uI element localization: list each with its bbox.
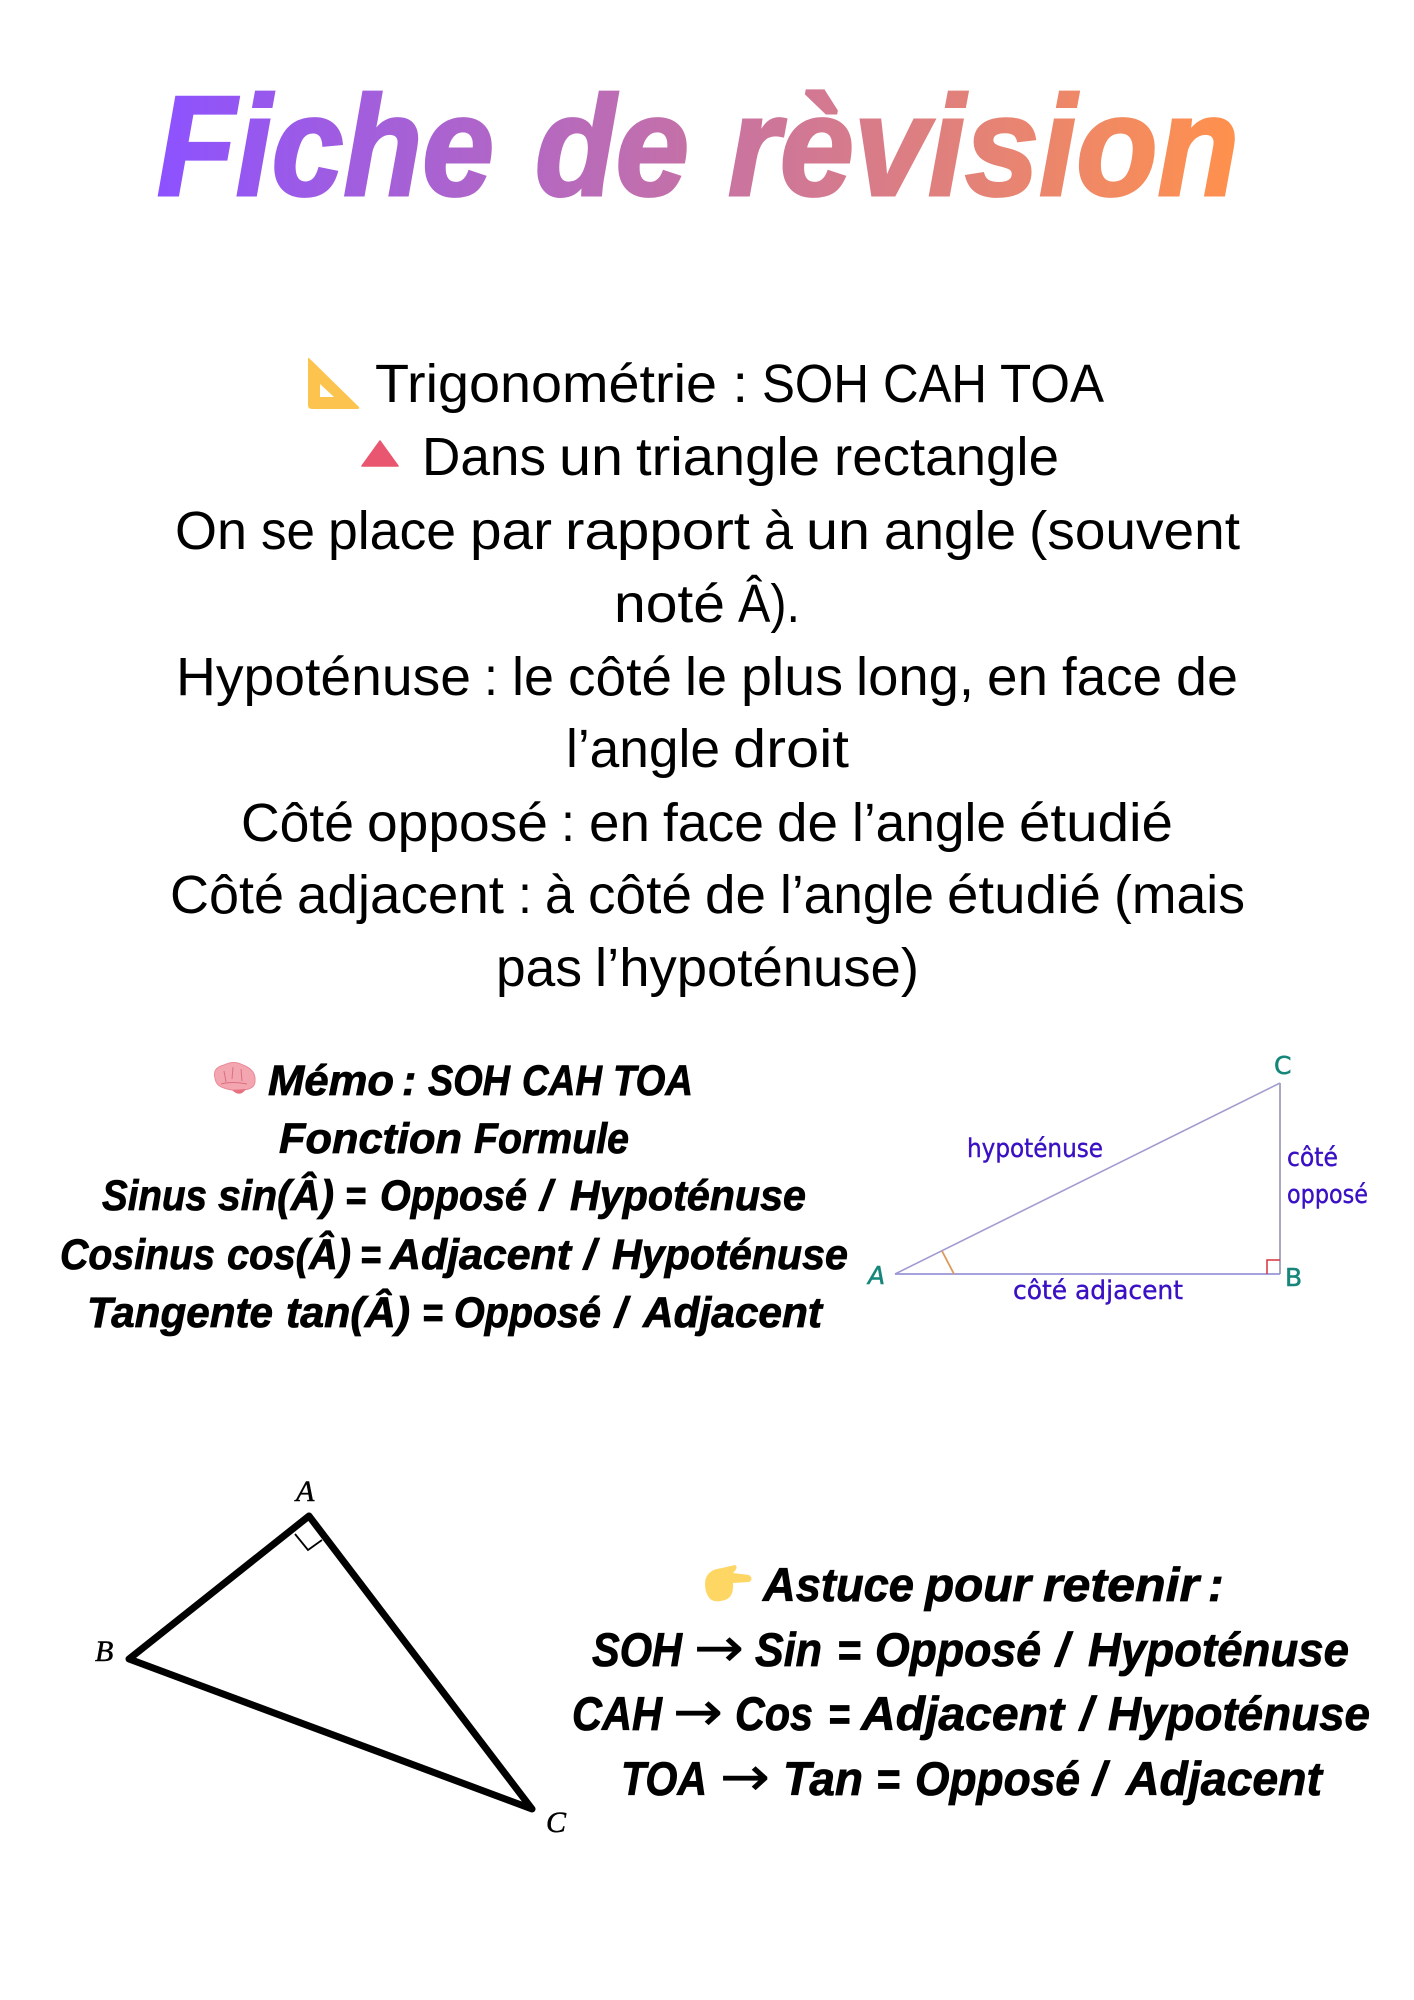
subheading: right triangle — [422, 427, 1059, 487]
mnemonic: SOH: = — [837, 1623, 861, 1676]
text block: mnemonic tip — [572, 1558, 1370, 1808]
mnemonic: CAH — [572, 1680, 1370, 1743]
mnemonic: CAH: = — [828, 1687, 850, 1740]
definition: hypotenuse: de — [1176, 647, 1238, 707]
mnemonic: SOH: SOH — [592, 1623, 683, 1676]
formula: cosine: cos(Â) — [227, 1230, 351, 1279]
definition: angle: (souvent — [1029, 501, 1240, 561]
title — [157, 67, 1239, 226]
definition: hypotenuse: plus — [741, 647, 843, 707]
mnemonic: SOH: Sin — [755, 1623, 822, 1676]
table header: Formule — [474, 1115, 629, 1163]
heading: trigonometry: Trigonométrie : — [375, 354, 748, 414]
formula: cosine: Cosinus — [60, 1231, 215, 1279]
definition: angle: On — [175, 501, 247, 561]
right angle square — [295, 1534, 322, 1550]
definition: opposite side: en — [589, 793, 650, 853]
definition: angle: à — [764, 501, 794, 561]
formula: sine: = — [345, 1172, 366, 1220]
mnemonic: TOA: = — [876, 1752, 900, 1805]
formula: tangent: = — [422, 1289, 443, 1337]
mnemonic: CAH: Cos — [735, 1687, 813, 1740]
side label: opposite — [1287, 1143, 1368, 1210]
formula: tangent: / — [613, 1289, 631, 1337]
formula: tangent: Adjacent — [642, 1289, 824, 1337]
memo heading: TOA — [613, 1057, 693, 1105]
definition: hypotenuse: : — [484, 647, 498, 707]
vertex labels: B — [95, 1635, 113, 1668]
icon: brain — [214, 1062, 255, 1094]
mnemonic: SOH: Opposé — [875, 1623, 1041, 1676]
side label: adjacent: côté adjacent — [1013, 1276, 1183, 1306]
definition: adjacent side: pas — [496, 938, 582, 998]
definition: opposite side — [241, 793, 1173, 853]
mnemonic: SOH: Hypoténuse — [1088, 1623, 1349, 1676]
formula: tangent: Tangente — [87, 1289, 273, 1337]
formula: sine — [102, 1171, 806, 1220]
definition: adjacent side: à — [545, 865, 575, 925]
formula: tangent — [87, 1288, 824, 1337]
definition: hypotenuse: en — [987, 647, 1048, 707]
definition: adjacent side — [170, 865, 1245, 998]
formula: sine: Hypoténuse — [570, 1172, 806, 1220]
definition: hypotenuse: Hypoténuse — [176, 647, 471, 707]
definition: adjacent side: (mais — [1114, 865, 1245, 925]
vertex labels: A — [866, 1261, 885, 1290]
definition: angle — [175, 501, 1240, 634]
definition: adjacent side: l’angle — [780, 865, 934, 925]
definition: angle: place — [328, 501, 456, 561]
definition: hypotenuse: le — [512, 647, 554, 707]
definition: angle: noté — [614, 574, 725, 634]
definition: adjacent side: côté — [588, 865, 692, 925]
formula: cosine: = — [360, 1231, 381, 1279]
triangle sides — [895, 1083, 1280, 1274]
mnemonic: TOA: → — [720, 1745, 770, 1808]
definition: opposite side: opposé — [367, 793, 548, 853]
vertex labels: A — [294, 1475, 315, 1508]
definition: adjacent side: l’hypoténuse) — [595, 938, 919, 998]
definition: hypotenuse: côté — [568, 647, 672, 707]
definition: angle: un — [806, 501, 870, 561]
icon: pointing hand — [705, 1565, 752, 1601]
side label: hypotenuse: hypoténuse — [967, 1134, 1103, 1164]
angle mark — [942, 1251, 954, 1274]
mnemonic: CAH: CAH — [572, 1687, 663, 1740]
subheading: right triangle: un — [559, 427, 623, 487]
side label: opposite: opposé — [1287, 1180, 1368, 1210]
definition: opposite side: de — [777, 793, 838, 853]
triangle outline — [129, 1516, 532, 1809]
text block: memo formulas — [60, 1057, 848, 1337]
mnemonic: TOA — [621, 1745, 1324, 1808]
formula: tangent: Opposé — [454, 1289, 601, 1337]
tip heading: : — [1208, 1558, 1224, 1611]
definition: angle: Â). — [738, 574, 800, 634]
tip heading — [762, 1558, 1224, 1611]
definition: opposite side: l’angle — [852, 793, 1006, 853]
memo heading: SOH — [428, 1057, 511, 1105]
subheading: right triangle: Dans — [422, 427, 546, 487]
definition: angle: par — [470, 501, 552, 561]
mnemonic: CAH: / — [1078, 1687, 1098, 1740]
formula: sine: Opposé — [380, 1172, 527, 1220]
vertex labels: C — [1274, 1051, 1291, 1080]
memo heading: : — [402, 1057, 416, 1105]
formula: cosine: Hypoténuse — [612, 1231, 848, 1279]
mnemonic: CAH: Hypoténuse — [1108, 1687, 1370, 1740]
mnemonic: TOA: Adjacent — [1125, 1752, 1324, 1805]
vertex labels — [95, 1475, 567, 1839]
definition: adjacent side: Côté — [170, 865, 284, 925]
vertex labels — [866, 1051, 1302, 1292]
title: rèvision — [728, 67, 1239, 226]
diagram: labelled right triangle — [866, 1051, 1368, 1306]
formula: tangent: tan(Â) — [286, 1288, 410, 1337]
heading: trigonometry: SOH — [762, 354, 869, 414]
right angle mark — [1267, 1260, 1280, 1274]
tip heading: retenir — [1043, 1558, 1202, 1611]
vertex labels: B — [1285, 1263, 1302, 1292]
mnemonic: SOH — [592, 1616, 1349, 1679]
formula: sine: Sinus — [102, 1172, 207, 1220]
title: Fiche — [157, 67, 494, 226]
definition: adjacent side: : — [518, 865, 532, 925]
mnemonic: SOH: → — [694, 1616, 744, 1679]
definition: hypotenuse: long, — [856, 647, 974, 707]
side label: opposite: côté — [1287, 1143, 1338, 1173]
formula: cosine: / — [582, 1231, 600, 1279]
memo heading — [268, 1057, 693, 1105]
tip heading: pour — [923, 1558, 1034, 1611]
definition: angle: angle — [884, 501, 1016, 561]
formula: sine: sin(Â) — [218, 1171, 334, 1220]
mnemonic: TOA: Tan — [783, 1752, 863, 1805]
definition: hypotenuse: le — [685, 647, 727, 707]
definition: opposite side: Côté — [241, 793, 354, 853]
memo heading: CAH — [522, 1057, 603, 1105]
heading: trigonometry: TOA — [1000, 354, 1104, 414]
formula: sine: / — [538, 1172, 556, 1220]
mnemonic: SOH: / — [1054, 1623, 1074, 1676]
vertex labels: C — [546, 1806, 567, 1839]
formula: cosine — [60, 1230, 848, 1279]
definition: adjacent side: adjacent — [297, 865, 504, 925]
definition: opposite side: étudié — [1019, 793, 1173, 853]
mnemonic: TOA: Opposé — [915, 1752, 1080, 1805]
text block: trigonometry introduction — [170, 354, 1245, 998]
tip heading: Astuce — [762, 1558, 914, 1611]
icon: set square — [308, 358, 359, 409]
mnemonic: TOA: / — [1091, 1752, 1111, 1805]
definition: adjacent side: étudié — [947, 865, 1101, 925]
diagram: black triangle ABC — [95, 1475, 567, 1839]
title: de — [535, 67, 689, 226]
definition: hypotenuse: l’angle — [566, 719, 720, 779]
definition: opposite side: face — [663, 793, 764, 853]
definition: adjacent side: de — [705, 865, 766, 925]
definition: angle: se — [261, 501, 315, 561]
definition: angle: rapport — [565, 501, 750, 561]
definition: hypotenuse: droit — [733, 719, 849, 779]
subheading: right triangle: triangle — [636, 427, 820, 487]
definition: hypotenuse — [176, 647, 1238, 779]
heading: trigonometry — [375, 354, 1104, 414]
mnemonic: TOA: TOA — [621, 1752, 707, 1805]
memo heading: Mémo — [268, 1057, 394, 1105]
table header: Fonction — [279, 1115, 462, 1163]
mnemonic: CAH: → — [673, 1680, 723, 1743]
table header — [279, 1115, 629, 1163]
subheading: right triangle: rectangle — [834, 427, 1059, 487]
formula: cosine: Adjacent — [389, 1231, 573, 1279]
definition: opposite side: : — [561, 793, 575, 853]
heading: trigonometry: CAH — [883, 354, 987, 414]
icon: red triangle — [362, 441, 398, 466]
definition: hypotenuse: face — [1062, 647, 1162, 707]
mnemonic: CAH: Adjacent — [860, 1687, 1066, 1740]
